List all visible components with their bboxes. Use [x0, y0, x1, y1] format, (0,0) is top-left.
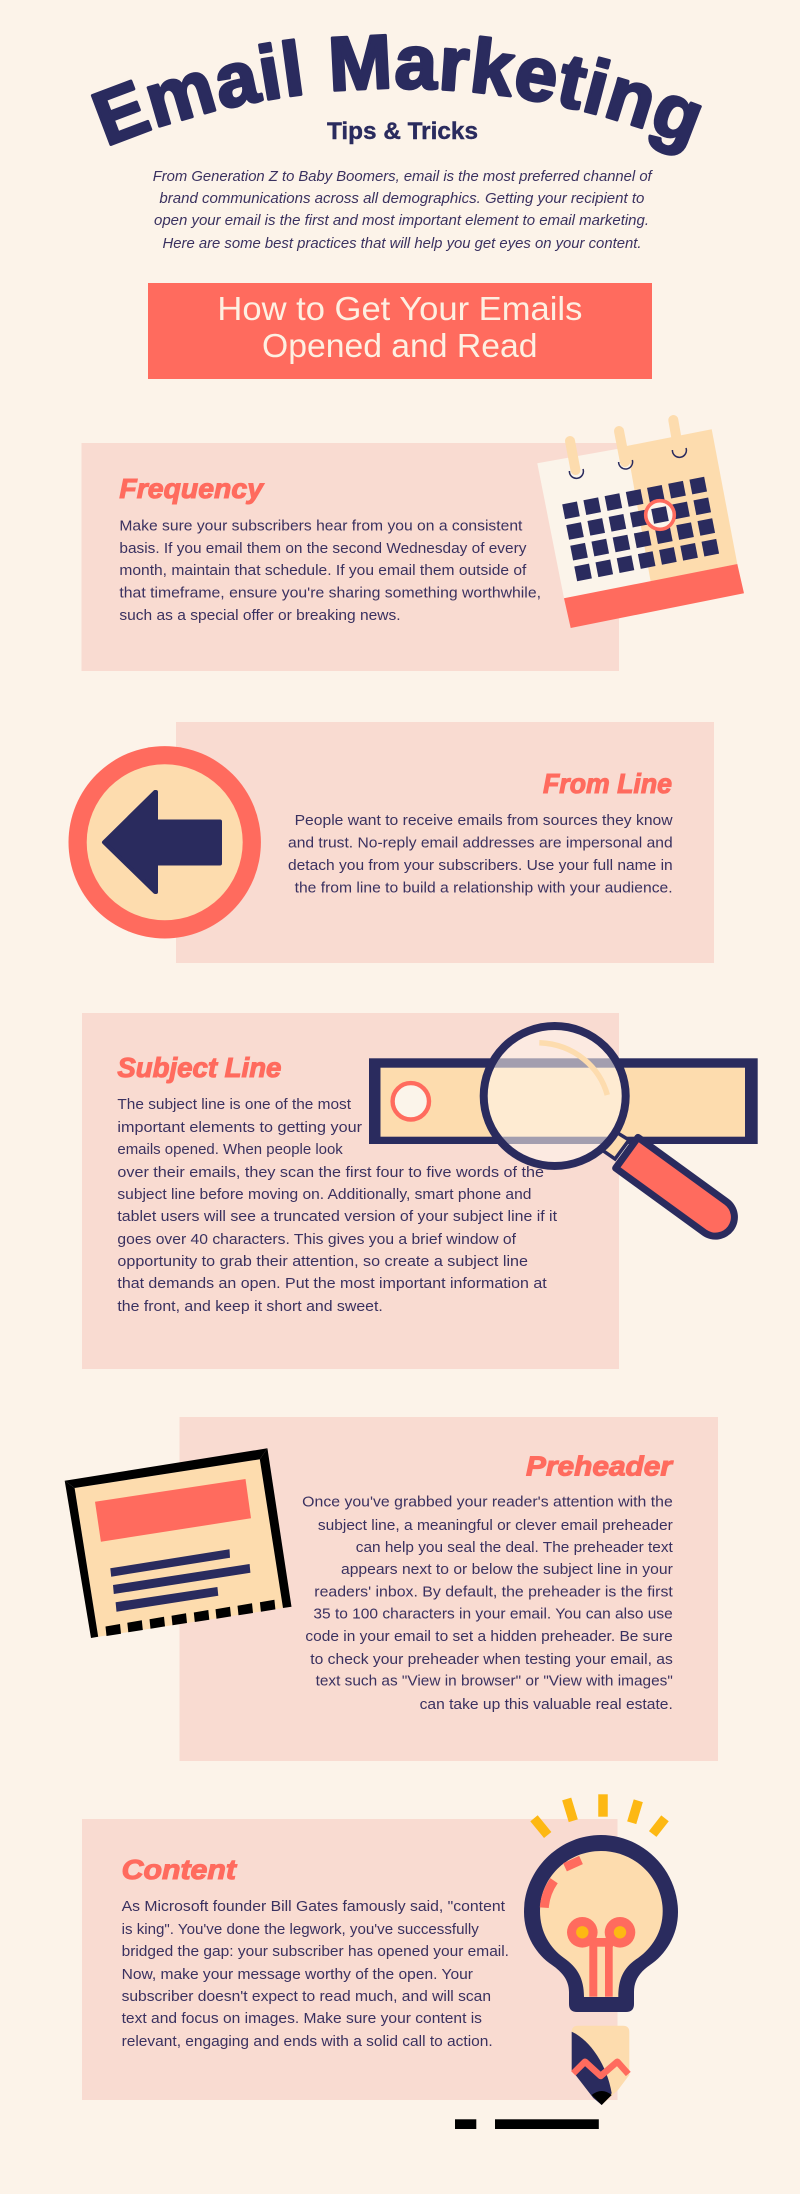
text: preheader body: can help you seal the deal. The preheader text: [356, 1539, 674, 1556]
text: frequency body: basis. If you email them on the second Wednesday of every: [119, 540, 527, 557]
text: from line body: [288, 812, 673, 897]
panel: content: [82, 1794, 678, 2105]
text: preheader body: Once you've grabbed your reader's attention with the: [302, 1494, 673, 1511]
text: subject line body: opportunity to grab their attention, so create a subject line: [117, 1253, 528, 1270]
banner: How to Get Your Emails: [217, 290, 582, 327]
icon: calendar: [537, 420, 744, 628]
heading: subject line: Subject Line: [117, 1052, 281, 1083]
text: subject line body: subject line before moving on. Additionally, smart phone and: [117, 1186, 531, 1203]
text: content body: As Microsoft founder Bill Gates famously said, "content: [122, 1898, 506, 1915]
heading: content: Content: [122, 1854, 238, 1885]
text: content body: Now, make your message worthy of the open. Your: [122, 1966, 473, 1983]
text: preheader body: [302, 1494, 674, 1713]
text: from line body: and trust. No-reply email addresses are impersonal and: [288, 835, 673, 852]
text: from line body: the from line to build a relationship with your audience.: [295, 880, 673, 897]
text: subject line body: The subject line is one of the most: [117, 1096, 352, 1113]
text: subject line body: goes over 40 characters. This gives you a brief window of: [117, 1231, 517, 1248]
intro text: [153, 168, 654, 252]
intro text: From Generation Z to Baby Boomers, email is the most preferred channel of: [153, 168, 654, 185]
text: subject line body: the front, and keep it short and sweet.: [117, 1298, 383, 1315]
text: preheader body: readers' inbox. By default, the preheader is the first: [314, 1584, 674, 1601]
text: preheader body: appears next to or below the subject line in your: [341, 1561, 673, 1578]
text: content body: relevant, engaging and ends with a solid call to action.: [122, 2033, 493, 2050]
footer bars: [455, 2119, 599, 2129]
text: from line body: detach you from your subscribers. Use your full name in: [288, 857, 673, 874]
panel: preheader: [65, 1417, 718, 1761]
icon: email preview: [65, 1448, 292, 1638]
text: subject line body: emails opened. When people look: [117, 1141, 343, 1158]
heading: frequency: Frequency: [119, 473, 264, 504]
text: frequency body: that timeframe, ensure you're sharing something worthwhile,: [119, 585, 541, 602]
text: from line body: People want to receive emails from sources they know: [295, 812, 673, 829]
text: frequency body: such as a special offer or breaking news.: [119, 607, 401, 624]
text: preheader body: subject line, a meaningful or clever email preheader: [318, 1517, 673, 1534]
title: Email Marketing: [90, 34, 702, 156]
text: preheader body: 35 to 100 characters in your email. You can also use: [313, 1606, 673, 1623]
text: subject line body: tablet users will see a truncated version of your subject line if it: [117, 1208, 558, 1225]
panel: subject line: [82, 1013, 758, 1369]
intro text: Here are some best practices that will help you get eyes on your content.: [162, 235, 642, 252]
icon: search bar and magnifying glass: [369, 1026, 758, 1249]
text: content body: text and focus on images. Make sure your content is: [122, 2010, 482, 2027]
banner: [148, 283, 652, 379]
intro text: open your email is the first and most important element to email marketing.: [154, 212, 649, 229]
text: content body: bridged the gap: your subscriber has opened your email.: [122, 1943, 509, 1960]
text: preheader body: to check your preheader when testing your email, as: [310, 1651, 673, 1668]
icon: back arrow: [68, 746, 261, 938]
intro text: brand communications across all demographics. Getting your recipient to: [159, 190, 644, 207]
text: preheader body: code in your email to set a hidden preheader. Be sure: [305, 1628, 673, 1645]
text: frequency body: [119, 518, 541, 624]
banner: Opened and Read: [262, 327, 538, 364]
text: content body: [122, 1898, 509, 2050]
text: subject line body: important elements to getting your: [117, 1119, 362, 1136]
text: content body: subscriber doesn't expect to read much, and will scan: [122, 1988, 491, 2005]
text: subject line body: that demands an open. Put the most important information at: [117, 1275, 548, 1292]
text: content body: is king". You've done the legwork, you've successfully: [122, 1921, 479, 1938]
panel: from line: [68, 722, 714, 963]
text: subject line body: over their emails, they scan the first four to five words of the: [117, 1164, 544, 1181]
heading: from line: From Line: [543, 768, 672, 799]
icon: pencil: [572, 2026, 629, 2105]
text: preheader body: can take up this valuable real estate.: [420, 1696, 673, 1713]
text: preheader body: text such as "View in browser" or "View with images": [316, 1673, 673, 1690]
heading: preheader: Preheader: [526, 1451, 674, 1482]
text: frequency body: Make sure your subscribers hear from you on a consistent: [119, 518, 523, 535]
text: subject line body: [117, 1096, 558, 1315]
icon: light bulb: [524, 1794, 678, 2012]
panel: frequency: [82, 420, 744, 671]
text: frequency body: month, maintain that schedule. If you email them outside of: [119, 562, 527, 579]
subtitle: Tips & Tricks: [327, 118, 478, 145]
